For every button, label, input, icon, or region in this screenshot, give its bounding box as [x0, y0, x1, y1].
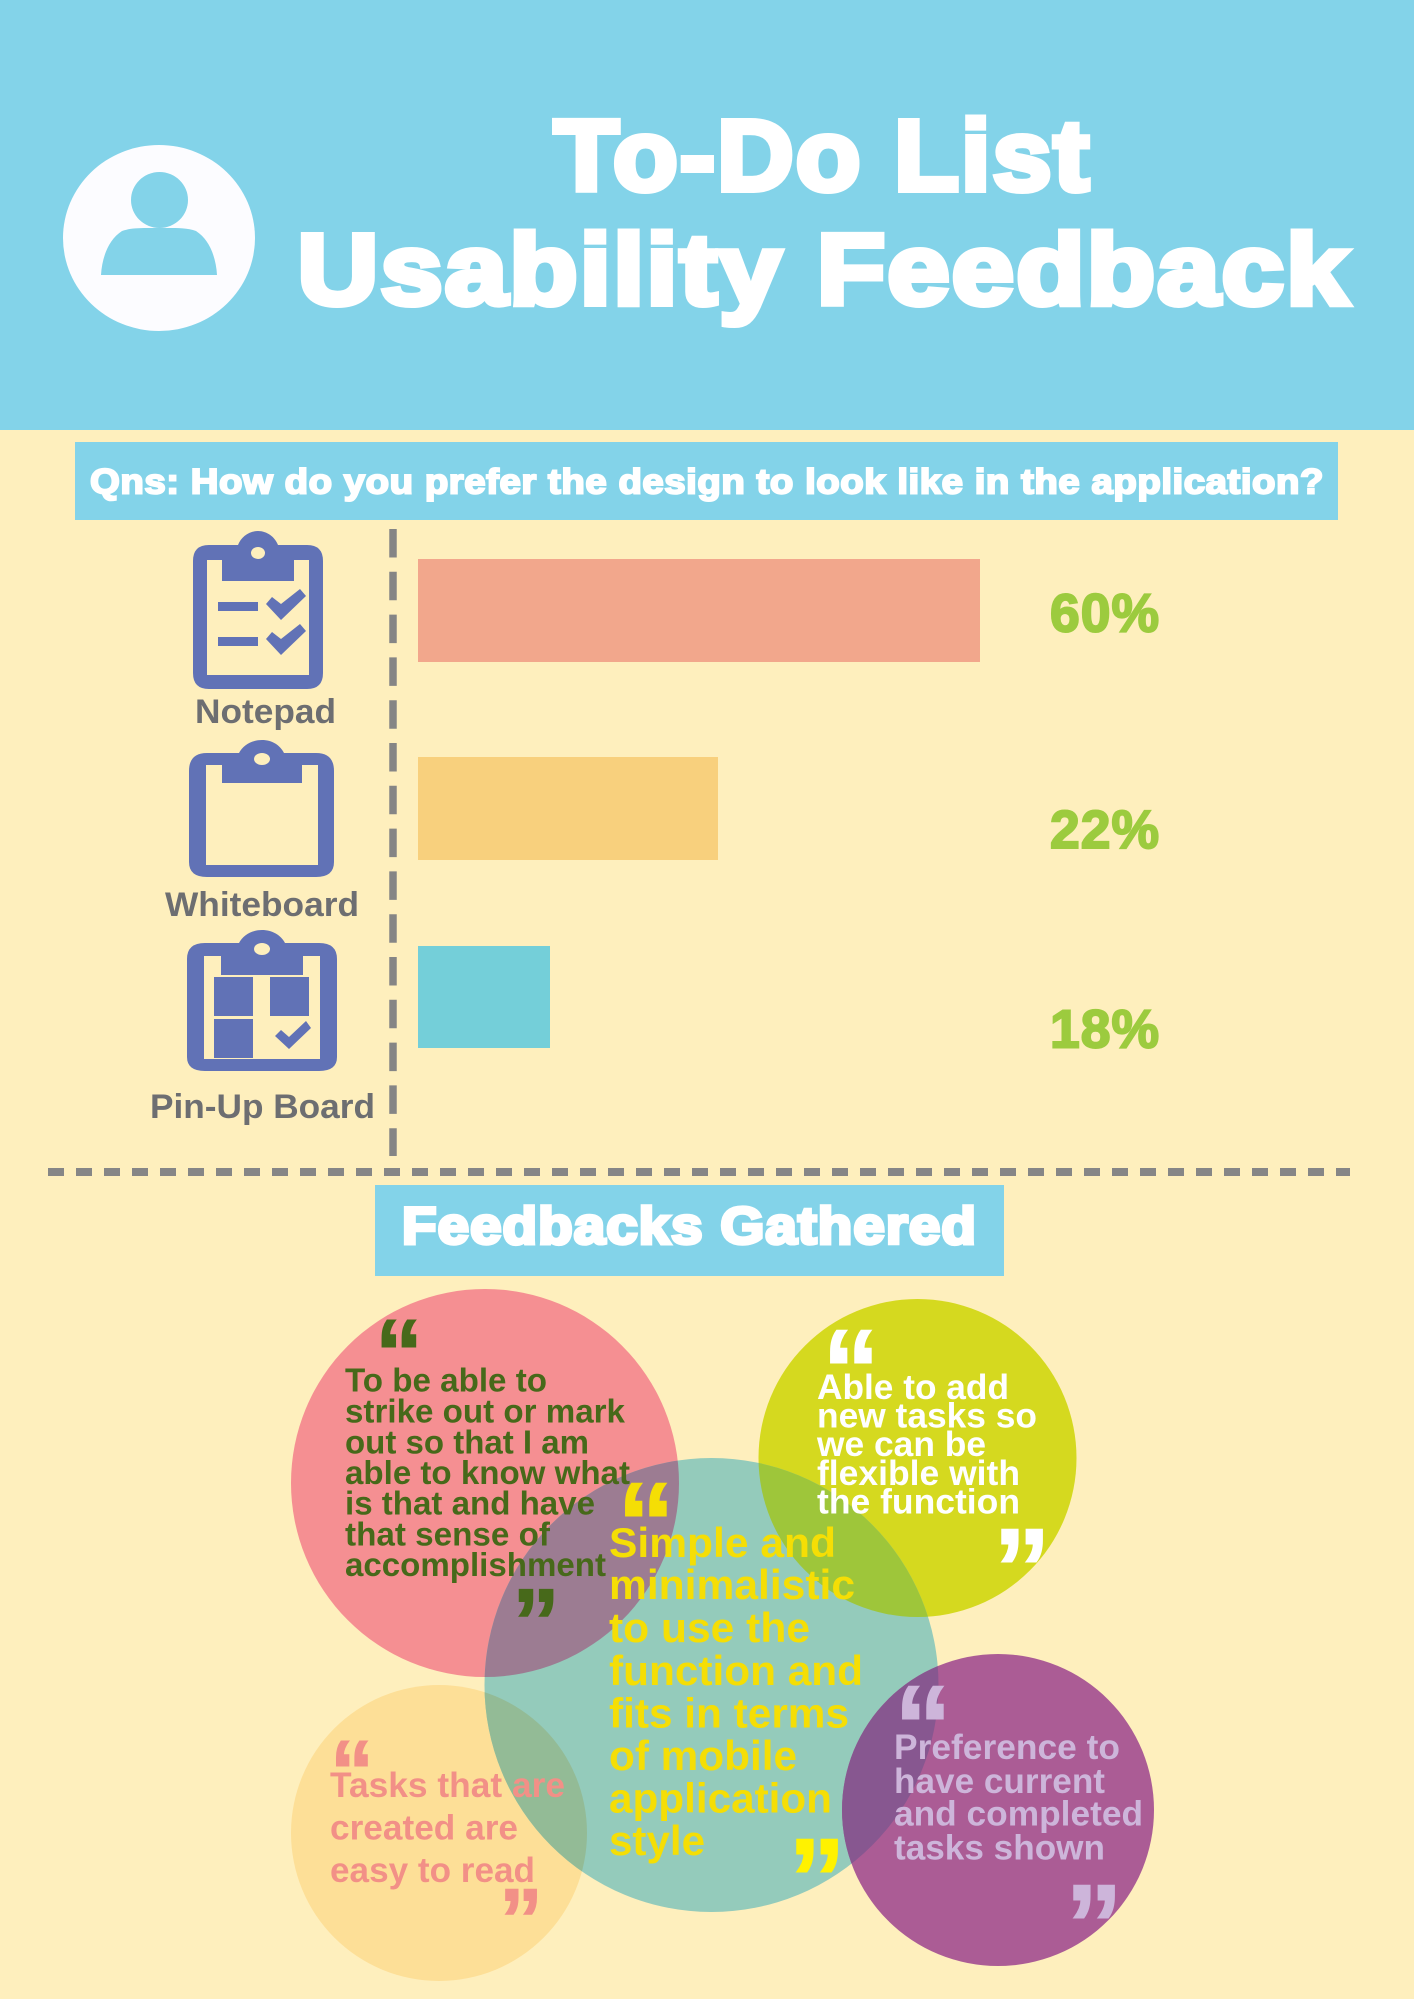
value: 18%: 18%	[1050, 1000, 1160, 1060]
icon: whiteboard clipboard	[189, 740, 334, 877]
quote mark close: ”	[512, 1569, 560, 1676]
quote: pink bubble: accomplishment	[345, 1546, 606, 1583]
bar: Whiteboard 22%	[418, 757, 718, 860]
quote: teal centre bubble: of mobile	[609, 1732, 797, 1779]
feedback bubbles	[291, 1289, 1154, 1981]
quote: lime bubble: we can be	[816, 1425, 986, 1464]
quote mark close: ”	[788, 1814, 846, 1944]
quote mark open: “	[375, 1300, 423, 1407]
quote mark open: “	[822, 1305, 880, 1435]
quote: teal centre bubble: minimalistic	[609, 1561, 855, 1608]
quote: lime bubble: Able to add	[817, 1368, 1009, 1407]
quote: orange bubble: Tasks that are	[330, 1766, 565, 1805]
quote: purple bubble	[894, 1661, 1143, 1990]
bubble: orange	[291, 1685, 587, 1981]
quote: pink bubble: that sense of	[345, 1516, 551, 1552]
quote: teal centre bubble: application	[609, 1774, 832, 1822]
quote: teal centre bubble: fits in terms	[609, 1690, 849, 1736]
question banner	[75, 442, 1338, 520]
quote: lime bubble: new tasks so	[817, 1396, 1037, 1436]
bubble: teal centre	[484, 1458, 938, 1912]
quote: teal centre bubble	[609, 1458, 863, 1944]
icon: user avatar	[63, 145, 255, 331]
quote: lime bubble: flexible with	[817, 1454, 1020, 1493]
bubble: pink	[291, 1289, 679, 1677]
label: Notepad: Notepad	[195, 693, 336, 731]
quote: purple bubble: have current	[894, 1762, 1105, 1801]
quote: pink bubble	[345, 1300, 630, 1676]
quote: teal centre bubble: function and	[609, 1647, 863, 1694]
quote: orange bubble	[330, 1722, 565, 1969]
quote: teal centre bubble: to use the	[609, 1604, 810, 1651]
quote: lime bubble	[816, 1305, 1051, 1634]
quote: purple bubble: tasks shown	[894, 1828, 1105, 1868]
question banner: Qns: How do you prefer the design to look like in the application?	[90, 462, 1324, 502]
bubble: purple	[842, 1654, 1154, 1966]
label: Pin-Up Board: Pin-Up Board	[150, 1088, 375, 1126]
label: Whiteboard: Whiteboard	[165, 886, 359, 924]
title	[298, 100, 1350, 326]
icon: notepad clipboard	[193, 531, 323, 689]
quote mark open: “	[330, 1722, 374, 1821]
quote: purple bubble: and completed	[894, 1794, 1143, 1834]
quote: orange bubble: created are	[330, 1808, 518, 1848]
quote mark close: ”	[1065, 1860, 1123, 1990]
icon: pin-up board clipboard	[187, 930, 337, 1071]
quote: purple bubble: Preference to	[894, 1728, 1120, 1767]
header banner	[0, 0, 1414, 430]
quote mark open: “	[894, 1661, 952, 1791]
value: 60%: 60%	[1050, 584, 1160, 644]
bar: Notepad 60%	[418, 559, 980, 662]
heading: Feedbacks Gathered: Feedbacks Gathered	[402, 1198, 977, 1256]
quote: pink bubble: strike out or mark	[345, 1392, 626, 1430]
quote: pink bubble: is that and have	[345, 1484, 595, 1522]
quote mark open: “	[617, 1458, 675, 1588]
title: To-Do List	[554, 100, 1091, 212]
quote mark close: ”	[993, 1504, 1051, 1634]
quote mark close: ”	[499, 1870, 543, 1969]
value: 22%: 22%	[1050, 800, 1160, 860]
quote: pink bubble: To be able to	[345, 1362, 547, 1398]
bubble: lime	[758, 1299, 1076, 1617]
bar: Pin-Up Board 18%	[418, 946, 550, 1048]
bar chart	[418, 559, 1160, 1060]
quote: orange bubble: easy to read	[330, 1851, 535, 1890]
title: Usability Feedback	[298, 214, 1350, 326]
quote: teal centre bubble: style	[609, 1817, 705, 1864]
vertical dashed axis	[389, 529, 397, 1156]
heading: Feedbacks Gathered	[375, 1185, 1004, 1276]
quote: teal centre bubble: Simple and	[609, 1519, 836, 1566]
quote: lime bubble: the function	[817, 1482, 1020, 1522]
quote: pink bubble: out so that I am	[345, 1424, 589, 1460]
quote: pink bubble: able to know what	[345, 1454, 630, 1491]
